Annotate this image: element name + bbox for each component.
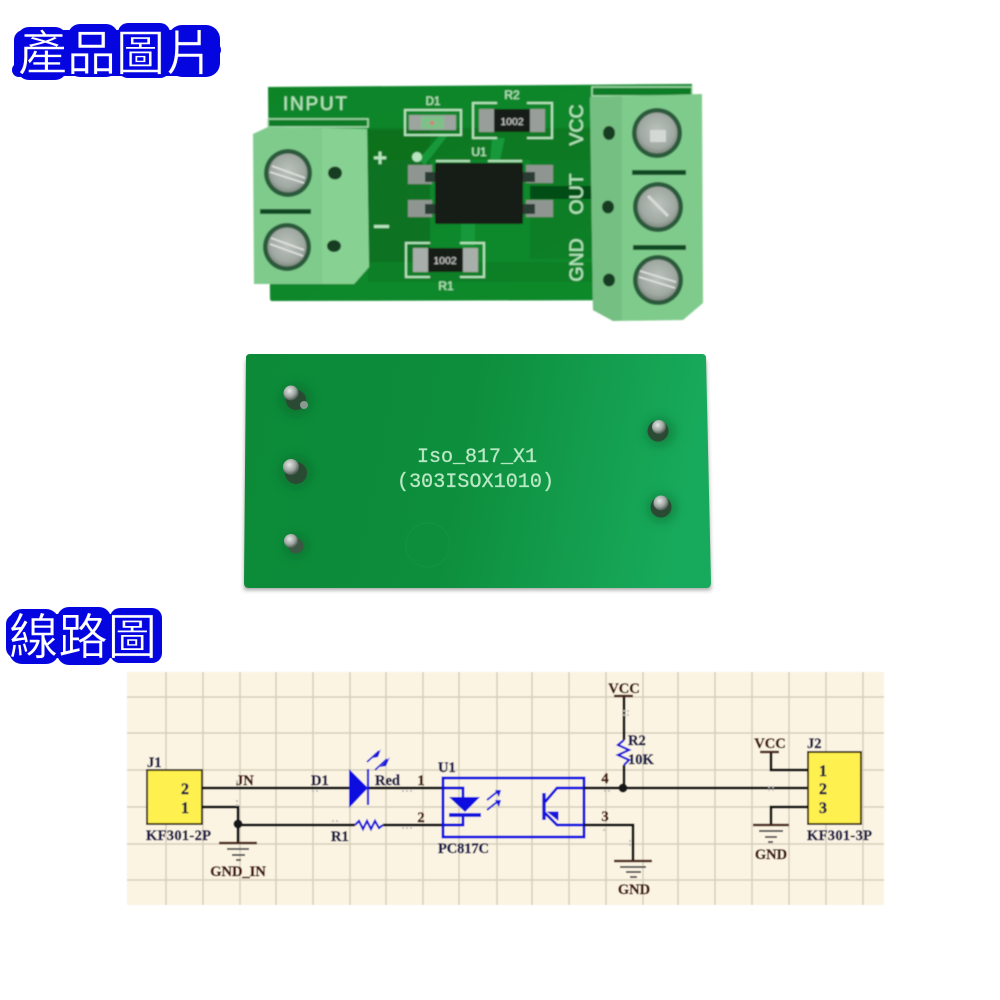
input wires: Red [375,773,400,789]
output wires: 3 [601,809,609,825]
optocoupler U1: U1 [471,145,487,159]
connector J2: 2 [819,781,827,798]
copper traces [368,128,593,282]
input wires: 2 [417,810,425,826]
connector J2: KF301-3P [807,828,872,844]
left terminal block [253,119,369,284]
resistor R2 symbol: 10K [628,752,654,768]
input wires: D1 [311,773,329,789]
LED D1 symbol [349,749,390,808]
input wires [202,773,463,845]
resistor R1: 1002 [433,255,457,267]
connector J1: 1 [181,800,189,817]
connector J1: KF301-2P [146,828,211,844]
connector J1: 2 [181,781,189,798]
board marking line 2: (303ISOX1010) [397,471,554,494]
label: INPUT: INPUT [283,94,347,115]
silkscreen: VCC: VCC [566,104,588,146]
ground symbol: GND_IN [210,843,266,880]
input wires: JN [236,773,254,789]
pin one dot [412,152,422,162]
resistor R1 symbol [355,821,383,829]
connector J1 [146,755,211,844]
panel: schematic [127,672,884,905]
resistor R2 symbol: R2 [628,733,646,749]
solder pin 2 [283,459,307,484]
solder pin 1 [284,386,308,410]
board marking line 1: Iso_817_X1 [417,446,537,469]
power symbol: VCC top: VCC [608,681,640,697]
connector J2 [807,736,872,844]
J2 power and ground wiring: VCC [754,736,786,752]
optocoupler U1 symbol [438,760,584,857]
resistor R2 [473,88,552,138]
connector J2: J2 [807,736,822,752]
silkscreen and LED D1 [405,96,461,135]
connector J1: J1 [147,755,162,771]
connector J2: 3 [819,800,827,817]
resistor R1: R1 [438,279,454,293]
ground symbol: GND centre [614,861,652,898]
ground symbol: GND centre: GND [618,882,650,898]
solder pin 3 [284,534,304,554]
photo: PCB front view [253,84,703,321]
ground symbol: GND_IN: GND_IN [210,864,266,880]
connector J2: 1 [819,763,827,780]
resistor R2 symbol [618,733,654,768]
input wires: R1 [331,829,349,845]
schematic background [127,672,884,905]
board shadow [244,360,711,590]
optocoupler U1 [408,145,553,224]
silkscreen and LED D1: D1 [426,96,440,108]
solder pin 4 [648,420,668,442]
resistor R2: 1002 [500,116,524,128]
output wires [584,696,808,861]
title: product images: 產品圖片 [18,28,214,81]
J2 power and ground wiring: GND [755,847,787,863]
right terminal block [590,87,703,321]
board [244,354,711,588]
label: plus: + [373,145,387,172]
silkscreen: OUT: OUT [566,173,588,215]
output wires: 4 [601,771,609,787]
resistor R2: R2 [504,88,520,102]
silkscreen: GND: GND [566,238,588,282]
photo: PCB back view [244,354,711,590]
solder pin 5 [650,496,672,518]
optocoupler U1 symbol: U1 [438,760,456,776]
optocoupler U1 symbol: PC817C [438,841,489,857]
resistor R1 [406,243,484,293]
label: minus [374,225,389,228]
J2 power and ground wiring [753,736,808,863]
circuit board [268,84,692,301]
title: circuit diagram: 線路圖 [9,611,157,665]
input wires: 1 [417,773,425,789]
